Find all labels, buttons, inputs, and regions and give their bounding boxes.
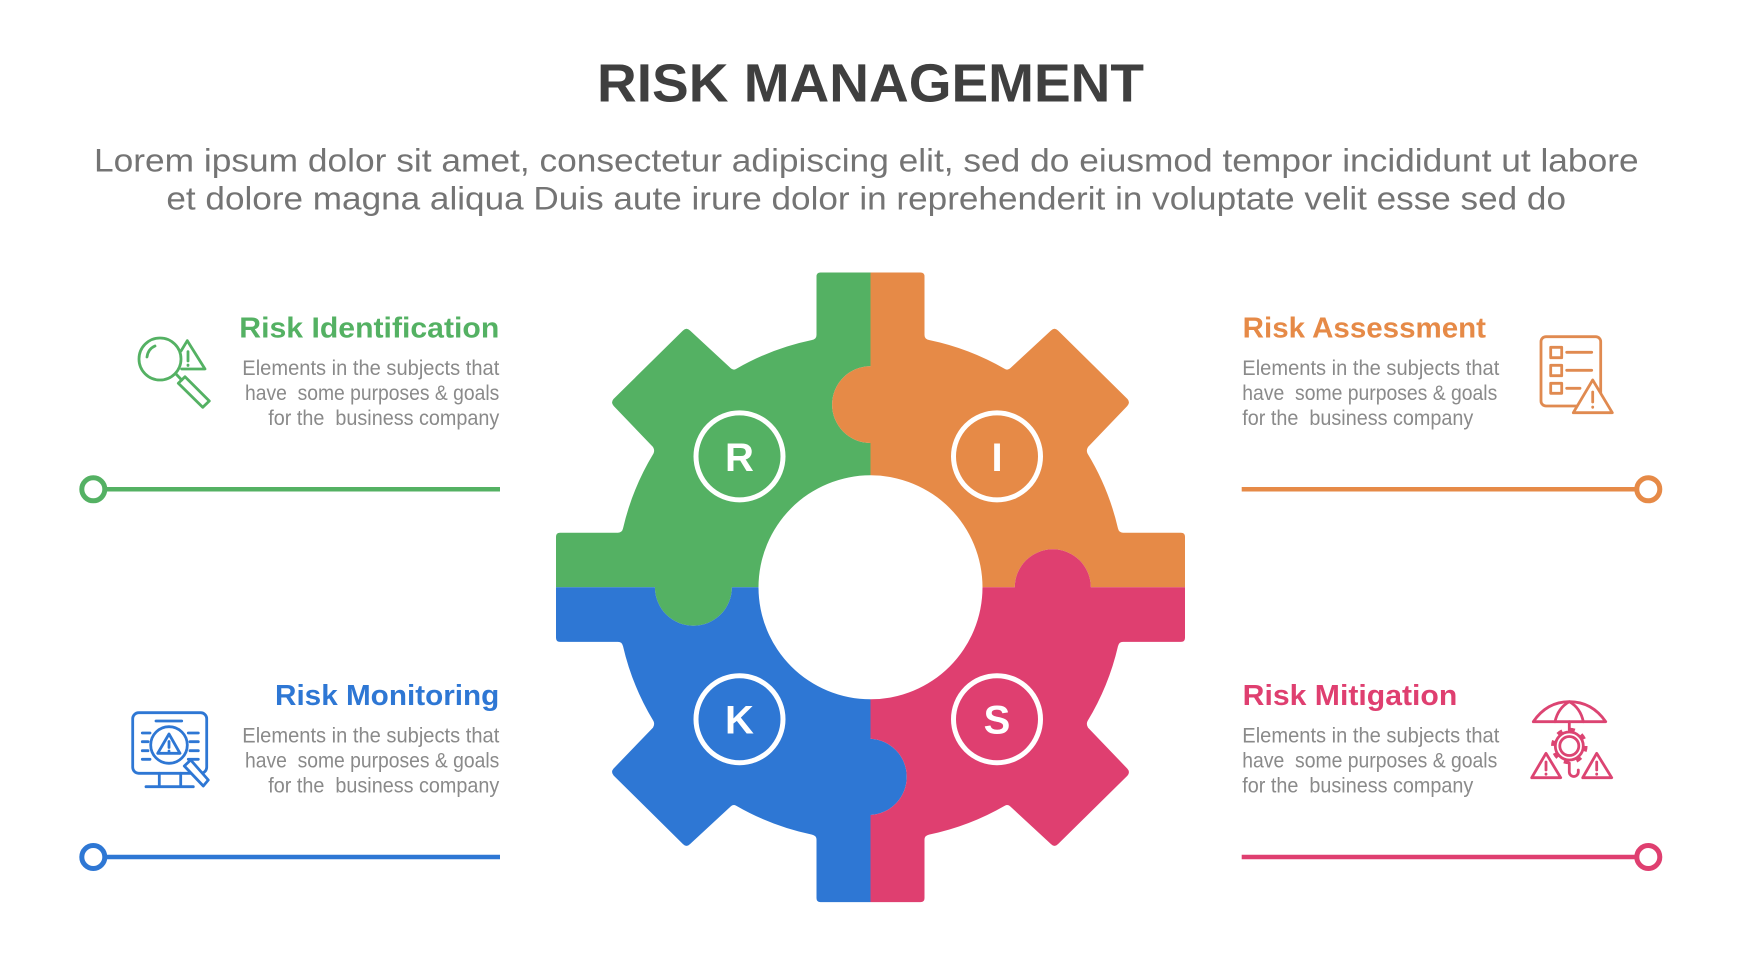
icon: monitor with magnifier	[133, 713, 208, 787]
letter badge I: I	[991, 436, 1003, 480]
connector line with node	[82, 846, 500, 868]
letter badge S: S	[984, 699, 1010, 743]
subtitle text block	[94, 143, 1639, 216]
letter badge S	[954, 676, 1040, 763]
body text: for the business company	[268, 407, 500, 430]
connector line with node	[1242, 846, 1660, 868]
body text: Elements in the subjects that	[242, 357, 499, 380]
icon: umbrella, gear and warnings	[1532, 702, 1612, 778]
body text: have some purposes & goals	[245, 382, 499, 405]
letter badge K	[696, 676, 783, 763]
panel: risk assessment	[1242, 313, 1660, 501]
panel: risk identification	[82, 313, 500, 501]
gear piece: pink S	[870, 549, 1185, 902]
gear piece: orange I	[832, 272, 1185, 587]
body text: have some purposes & goals	[1242, 749, 1497, 772]
connector line with node	[82, 478, 500, 501]
subtitle text block: et dolore magna aliqua Duis aute irure dolor in reprehenderit in voluptate velit esse sed do	[166, 180, 1566, 216]
heading: Risk Assessment	[1243, 313, 1486, 345]
body text: for the business company	[1242, 407, 1474, 430]
body text: for the business company	[1242, 774, 1474, 797]
letter badge R	[696, 413, 783, 500]
icon: magnifier with warning	[139, 338, 209, 407]
gear piece: blue K	[556, 587, 907, 902]
icon: checklist with warning	[1541, 337, 1612, 413]
connector line with node	[1242, 478, 1660, 501]
body text	[242, 357, 500, 430]
letter badge R: R	[725, 436, 754, 480]
heading: Risk Identification	[239, 313, 499, 345]
heading: Risk Monitoring	[275, 680, 499, 712]
letter badge K: K	[725, 699, 754, 743]
body text	[242, 724, 500, 797]
subtitle text block: Lorem ipsum dolor sit amet, consectetur adipiscing elit, sed do eiusmod tempor incididunt ut labore	[94, 143, 1639, 179]
gear piece: green R	[556, 272, 870, 626]
body text: for the business company	[268, 774, 500, 797]
body text: have some purposes & goals	[245, 749, 499, 772]
heading: Risk Mitigation	[1243, 680, 1457, 712]
body text	[1242, 724, 1499, 797]
body text	[1242, 357, 1499, 430]
body text: have some purposes & goals	[1242, 382, 1497, 405]
title: RISK MANAGEMENT	[597, 54, 1144, 114]
panel: risk mitigation	[1242, 680, 1660, 868]
body text: Elements in the subjects that	[242, 724, 499, 747]
panel: risk monitoring	[82, 680, 500, 868]
body text: Elements in the subjects that	[1242, 724, 1499, 747]
letter badge I	[954, 413, 1040, 500]
gear puzzle chart	[556, 272, 1185, 902]
body text: Elements in the subjects that	[1242, 357, 1499, 380]
